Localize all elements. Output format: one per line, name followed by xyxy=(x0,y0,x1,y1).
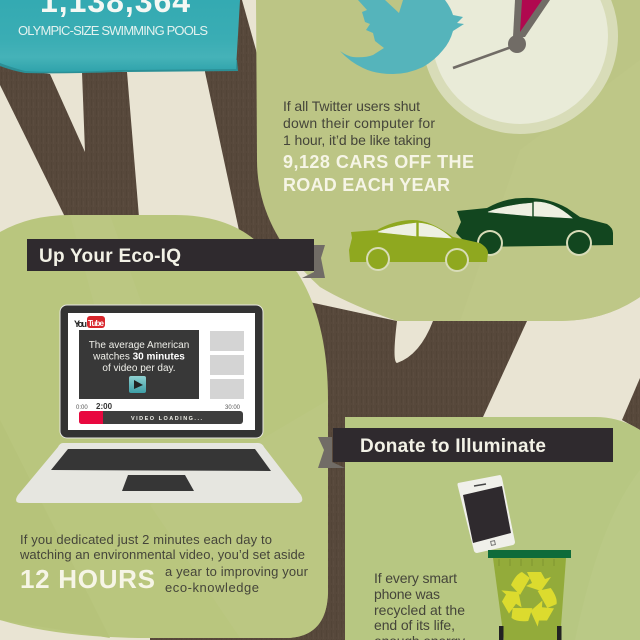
heading: donate to illuminate: Donate to Illuminate xyxy=(360,436,546,457)
youtube logo xyxy=(74,316,105,329)
timeline labels: 30:00 xyxy=(225,405,241,411)
text: cars highlight: 9,128 CARS OFF THE xyxy=(283,152,474,172)
panel: donate to illuminate xyxy=(318,417,640,640)
text: donate fact: If every smart xyxy=(374,570,457,586)
progress bar xyxy=(79,411,243,424)
heading: up your eco-iq xyxy=(27,239,314,271)
heading: donate to illuminate xyxy=(333,428,613,462)
text: donate fact xyxy=(374,570,465,640)
text: donate fact: end of its life, xyxy=(374,617,455,633)
text: eco-iq fact: watching an environmental video, you’d set aside xyxy=(19,547,305,562)
text: eco-iq fact continued xyxy=(165,564,309,595)
youtube logo: You xyxy=(74,319,87,329)
timeline labels: 0:00 xyxy=(76,405,88,411)
icon: smartphone xyxy=(458,475,515,553)
video player: of video per day. xyxy=(102,363,176,374)
laptop base xyxy=(16,443,302,503)
video player: The average American xyxy=(89,340,189,351)
text: eco-iq fact continued: a year to improving your xyxy=(165,564,309,579)
ribbon: donate fold xyxy=(318,437,345,468)
icon: light green car xyxy=(349,220,488,272)
panel: up your eco-iq xyxy=(0,215,328,638)
panel: swimming pools banner xyxy=(0,0,240,73)
icon: dark green car xyxy=(456,198,613,256)
trackpad xyxy=(122,475,194,491)
text: twitter fact: down their computer for xyxy=(283,115,435,131)
text: cars highlight: ROAD EACH YEAR xyxy=(283,175,450,195)
progress bar: VIDEO LOADING... xyxy=(131,416,202,422)
timeline labels xyxy=(76,402,241,411)
icon: clock xyxy=(422,0,618,134)
icon: laptop xyxy=(16,305,302,503)
timeline labels: 2:00 xyxy=(96,402,113,411)
laptop screen xyxy=(60,305,263,438)
ribbon: eco-iq fold xyxy=(302,245,325,278)
text: eco-iq fact xyxy=(19,532,305,562)
text: cars highlight xyxy=(283,152,474,195)
text: donate fact: recycled at the xyxy=(374,602,465,618)
heading: up your eco-iq: Up Your Eco-IQ xyxy=(39,246,181,267)
keyboard xyxy=(51,449,271,471)
text: donate fact: phone was xyxy=(374,586,440,602)
icon: twitter bird xyxy=(340,0,464,74)
panel: twitter xyxy=(256,0,640,321)
video player: watches 30 minutes xyxy=(92,352,185,362)
icon: recycling bin xyxy=(488,550,571,640)
text: twitter fact xyxy=(283,98,435,148)
text: eco-iq fact continued: eco-knowledge xyxy=(165,580,259,595)
text: twitter fact: 1 hour, it’d be like taking xyxy=(283,132,431,148)
text: 12 hours highlight: 12 HOURS xyxy=(20,564,155,594)
text: pools caption: OLYMPIC-SIZE SWIMMING POOLS xyxy=(18,23,208,38)
recycling symbol xyxy=(497,572,562,629)
youtube logo: Tube xyxy=(88,319,105,328)
text: eco-iq fact: If you dedicated just 2 minutes each day to xyxy=(20,532,272,547)
text: twitter fact: If all Twitter users shut xyxy=(283,98,420,114)
video thumbnails xyxy=(210,331,244,399)
video player xyxy=(79,330,199,399)
